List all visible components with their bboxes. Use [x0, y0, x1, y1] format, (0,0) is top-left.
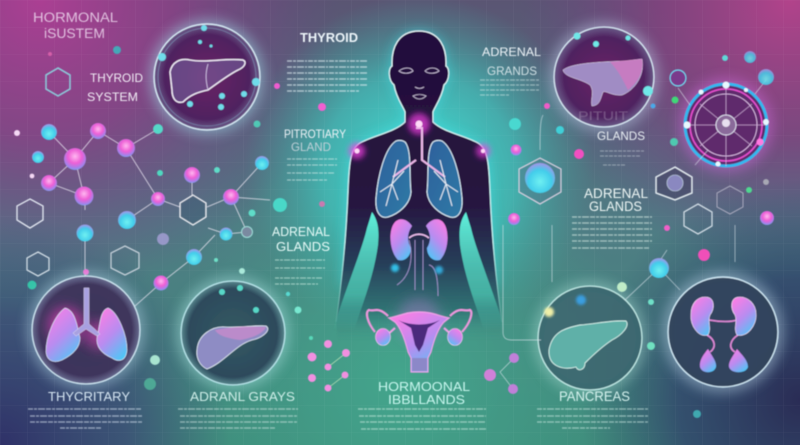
sphere: large cyan [525, 163, 555, 193]
label: pituitary gland: GLAND [291, 140, 331, 154]
label: pancreas: PANCREAS [559, 389, 630, 404]
trachea and bronchi [393, 128, 445, 177]
silhouette outline [336, 31, 502, 322]
label: thyroid system: THYROID [90, 71, 143, 85]
hexagon: upper-left molecule [46, 68, 70, 96]
label: hormonal glands: HORMOONAL [378, 379, 470, 394]
label: hormonal glands [378, 379, 470, 407]
panel: top-left liver circle [149, 19, 265, 135]
text block: thyroid description [287, 61, 368, 91]
text block: adranl grays description [178, 409, 298, 428]
panel: kidneys circle [662, 271, 784, 393]
label: hormonal glands: IBBLLANDS [388, 392, 465, 407]
icon: pancreas [549, 321, 627, 370]
panel: pancreas circle [533, 281, 647, 395]
icon: kidneys and adrenal drops [707, 320, 738, 352]
face [399, 68, 439, 99]
glow dots: right and center [274, 55, 769, 418]
label: thyroid system: SYSTEM [87, 90, 138, 104]
network bonds: right [482, 80, 766, 389]
text block: adrenal glands right description [572, 217, 652, 248]
figure: human silhouette [333, 31, 505, 372]
label: adrenal glands left: ADRENAL [272, 224, 330, 239]
text block: pituitary description [287, 159, 337, 180]
label: adrenal grands: ADRENAL [482, 45, 541, 59]
text block: adrenal grands description [480, 80, 540, 95]
icon: gland [563, 59, 643, 106]
title [33, 10, 119, 41]
icon: lungs [46, 308, 80, 361]
hexagon: lower [684, 204, 712, 234]
title: HORMONAL [33, 10, 119, 25]
panel: top-right organ circle [549, 22, 659, 132]
molecular network: left [14, 46, 270, 390]
text block: glands right description [600, 151, 645, 165]
kidneys [390, 219, 448, 296]
sphere: hexagon node [667, 175, 683, 191]
spheres: right network [273, 51, 774, 394]
label: adranl grays: ADRANL GRAYS [190, 389, 295, 404]
label: adrenal grands: GRANDS [487, 64, 537, 78]
diagram: hormone wheel [679, 78, 773, 172]
label: glands right: PITUIT [578, 109, 629, 123]
sparkles [158, 25, 260, 110]
label: adrenal glands right [584, 186, 648, 214]
silhouette body [336, 31, 502, 340]
thyroid and shoulder glows [349, 113, 490, 159]
text block: adrenal glands left description [275, 260, 325, 284]
pink molecule: bottom center [308, 340, 350, 392]
network bonds: left [49, 129, 270, 306]
hexagon: small center-left [111, 246, 139, 275]
label: adrenal glands right: ADRENAL [584, 186, 648, 201]
silhouette glow [342, 31, 496, 285]
uterus [367, 298, 471, 372]
panel: liver circle lower-left [176, 276, 290, 390]
spheres: left network [32, 123, 269, 290]
hexagon: central node [180, 195, 206, 225]
hexagon: faint [717, 186, 743, 214]
label: adrenal glands left [272, 224, 330, 254]
hexagon: small left [27, 252, 49, 276]
label: thyroid: THYROID [300, 31, 358, 45]
label: glands right [578, 109, 645, 143]
label: thycritary: THYCRITARY [48, 389, 130, 404]
label: adrenal glands right: GLANDS [589, 199, 642, 214]
label: glands right: GLANDS [597, 129, 645, 143]
label: thyroid system [87, 71, 143, 104]
hexagon with sphere [519, 158, 561, 204]
text block: pancreas description [537, 409, 648, 428]
hexagon: right node [656, 167, 692, 200]
icon: liver [197, 326, 268, 369]
arm gap: left [333, 212, 378, 330]
panel: lungs circle [27, 271, 145, 389]
label: adrenal grands [482, 45, 541, 78]
text block: thycritary description [28, 409, 142, 428]
hexagon: lower-left ring [17, 199, 43, 228]
title: iSUSTEM [44, 26, 105, 41]
molecular network: right [273, 51, 774, 418]
icon: liver outline [170, 60, 245, 102]
label: adrenal glands left: GLANDS [276, 239, 330, 254]
text block: hormonal glands description [358, 409, 486, 429]
lungs [376, 128, 462, 217]
glow dots: left [14, 46, 260, 390]
label: pituitary gland: PITROTIARY [284, 127, 346, 141]
label: pituitary gland [284, 127, 346, 154]
arm gap: right [460, 212, 505, 330]
